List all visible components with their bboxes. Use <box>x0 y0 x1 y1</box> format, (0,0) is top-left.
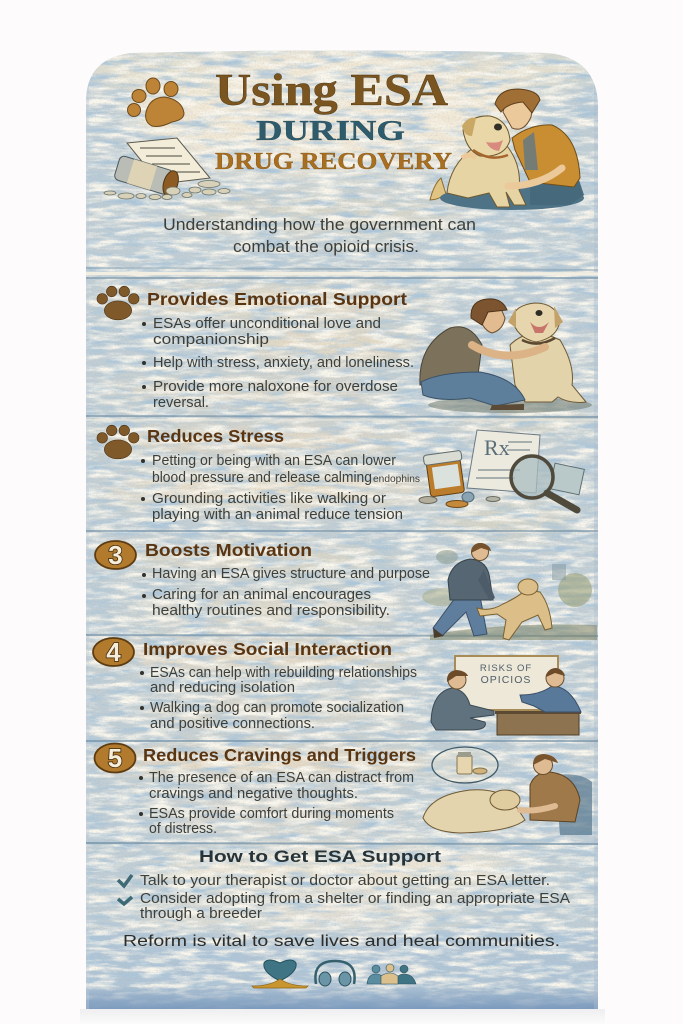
illustration: two people talking under sign: OPICIOS <box>481 674 531 686</box>
icon: paw <box>97 425 139 459</box>
bullet list <box>140 665 417 732</box>
illustration: prescription, medication and magnifier <box>419 430 584 510</box>
icon: number 5 badge: 5 <box>108 743 122 773</box>
bullet list: of distress. <box>149 821 217 837</box>
icon: check mark <box>118 897 132 904</box>
bullet list: endophins <box>373 473 420 485</box>
icon: group of people <box>367 964 416 984</box>
subtitle <box>163 216 476 256</box>
bullet list <box>142 316 414 411</box>
heading: Reduces Cravings and Triggers <box>143 745 416 765</box>
bullet list: Having an ESA gives structure and purpose <box>152 566 430 582</box>
panel: reduces cravings and triggers <box>94 743 592 837</box>
bullet list: Caring for an animal encourages <box>152 587 371 603</box>
heading: Boosts Motivation <box>145 540 312 560</box>
steps list: Consider adopting from a shelter or finding an appropriate ESA <box>140 891 570 907</box>
bullet list: Petting or being with an ESA can lower <box>152 453 396 469</box>
icon: paw <box>97 286 139 320</box>
icon: number 4 badge <box>93 637 134 667</box>
panel: how to get ESA support <box>118 848 570 988</box>
infographic <box>80 50 605 1016</box>
heading: Provides Emotional Support <box>147 289 407 309</box>
icon: headphones <box>315 961 355 986</box>
page shadow <box>80 1009 605 1024</box>
bullet list: and positive connections. <box>150 716 315 732</box>
bullet list: ESAs provide comfort during moments <box>149 806 394 822</box>
illustration: prescription, medication and magnifier: Rx <box>484 435 510 460</box>
panel: improves social interaction <box>93 637 581 735</box>
bullet list: companionship <box>153 332 269 348</box>
illustration: two people talking under sign: RISKS OF <box>480 663 532 674</box>
bullet list <box>142 566 430 619</box>
panel: textured card background <box>80 42 600 1011</box>
icon: pill bottle with prescription <box>104 138 230 200</box>
steps list: through a breeder <box>140 906 262 922</box>
panel: reduces stress <box>97 425 584 523</box>
heading: Reduces Stress <box>147 426 284 446</box>
illustration: two people talking under sign <box>431 656 581 735</box>
heading: Improves Social Interaction <box>143 639 392 659</box>
icon: check mark <box>118 875 132 886</box>
dividers <box>86 268 598 270</box>
title: Using ESA <box>215 64 448 115</box>
title <box>215 64 452 175</box>
icon: number 3 badge <box>95 540 136 570</box>
icon: number 3 badge: 3 <box>108 540 123 570</box>
steps list: Talk to your therapist or doctor about getting an ESA letter. <box>140 873 550 889</box>
icon: heart on open hands <box>252 960 308 988</box>
header <box>104 64 584 256</box>
steps list <box>140 873 570 922</box>
bullet list: and reducing isolation <box>150 680 295 696</box>
illustration: boy hugging dog <box>430 89 584 210</box>
bullet list: blood pressure and release calming <box>152 470 372 486</box>
bullet list: playing with an animal reduce tension <box>152 507 403 523</box>
bullet list: ESAs offer unconditional love and <box>153 316 381 332</box>
bullet list: Help with stress, anxiety, and loneliness. <box>153 355 414 371</box>
illustration: boy petting dog <box>420 299 592 413</box>
illustration: man walking dog <box>422 543 597 640</box>
bullet list: healthy routines and responsibility. <box>152 603 390 619</box>
illustration: man comforting dog with thought bubble <box>423 747 592 835</box>
bullet list: Walking a dog can promote socialization <box>150 700 404 716</box>
bullet list <box>139 770 414 837</box>
heading: How to Get ESA Support <box>199 848 442 866</box>
bullet list: Grounding activities like walking or <box>152 491 386 507</box>
panel: boosts motivation <box>95 540 597 640</box>
bullet list <box>141 453 420 523</box>
icon: number 5 badge <box>94 743 136 773</box>
bullet list: ESAs can help with rebuilding relationships <box>150 665 417 681</box>
bullet list: Provide more naloxone for overdose <box>153 379 398 395</box>
bullet list: The presence of an ESA can distract from <box>149 770 414 786</box>
bullet list: cravings and negative thoughts. <box>149 786 358 802</box>
panel: provides emotional support <box>97 286 592 413</box>
icon: number 4 badge: 4 <box>106 637 121 667</box>
icon: large paw print <box>128 78 184 126</box>
subtitle: combat the opioid crisis. <box>233 238 419 256</box>
title: DRUG RECOVERY <box>215 149 452 175</box>
title: DURING <box>256 116 405 147</box>
closing statement: Reform is vital to save lives and heal communities. <box>123 933 560 950</box>
subtitle: Understanding how the government can <box>163 216 476 234</box>
bullet list: reversal. <box>153 395 209 411</box>
